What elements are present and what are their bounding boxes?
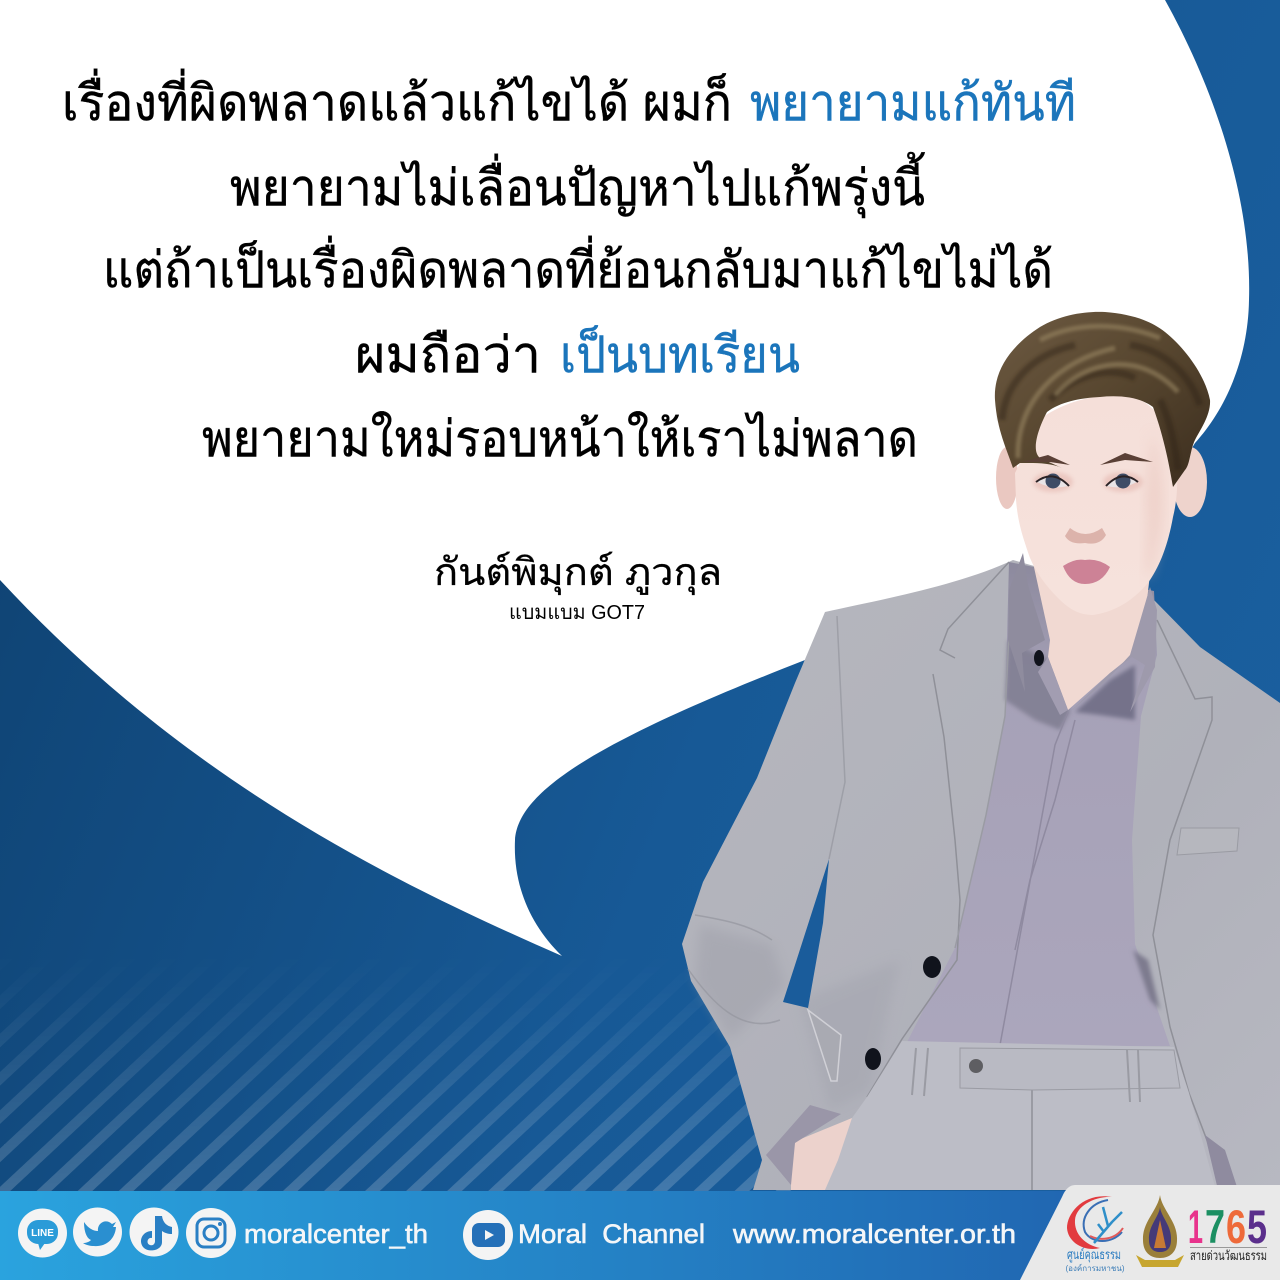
logo: 1765: 6 — [1226, 1200, 1246, 1253]
ear left — [996, 447, 1018, 509]
shirt placket — [1000, 712, 1075, 1045]
eyebrow right — [1100, 453, 1153, 465]
collar left — [1008, 553, 1045, 692]
eye shadow left — [1033, 472, 1073, 492]
waist button — [969, 1059, 983, 1073]
logo: moral center — [1066, 1196, 1125, 1273]
eye shadow right — [1103, 472, 1143, 492]
logo: 1765: 7 — [1205, 1200, 1225, 1253]
shirt — [905, 562, 1170, 1046]
cuff — [766, 1105, 841, 1185]
footer bar — [0, 1191, 1280, 1280]
hair — [995, 312, 1210, 487]
nose shadow — [1065, 528, 1106, 544]
ear right — [1173, 447, 1207, 517]
pocket — [1177, 828, 1239, 855]
person — [682, 312, 1280, 1190]
hair highlights — [1018, 326, 1178, 458]
social handle: moralcenter_th — [244, 1219, 428, 1249]
attribution name: กันต์พิมุกต์ ภูวกุล — [434, 551, 722, 595]
flap pocket — [808, 1010, 841, 1081]
eye right — [1106, 474, 1138, 488]
shirt dark area — [1005, 640, 1070, 730]
waistband — [960, 1048, 1180, 1090]
trousers — [825, 1041, 1216, 1190]
quote line 2: พยายามไม่เลื่อนปัญหาไปแก้พรุ่งนี้ — [230, 152, 925, 218]
quote text — [62, 69, 1076, 467]
belt loops — [912, 1048, 1140, 1190]
icon: Instagram — [186, 1208, 236, 1258]
icon: LINE — [18, 1208, 67, 1258]
jacket shade sleeve — [695, 925, 785, 1040]
eye left — [1036, 474, 1069, 488]
neck — [1028, 540, 1154, 710]
hand — [791, 1118, 852, 1190]
shirt dark area right — [1075, 665, 1135, 720]
logo panel — [1020, 1185, 1280, 1280]
quote line 1: เรื่องที่ผิดพลาดแล้วแก้ไขได้ ผมก็ — [62, 69, 732, 131]
face shading — [1145, 430, 1163, 578]
icon: Twitter — [73, 1208, 122, 1256]
logo: 1765: 1 — [1188, 1200, 1203, 1253]
jacket button lower — [865, 1048, 881, 1070]
arm gap — [783, 859, 829, 1008]
sleeve seam — [688, 616, 845, 1024]
quote line 5: พยายามใหม่รอบหน้าให้เราไม่พลาด — [202, 411, 918, 467]
logo: moral center: (องค์การมหาชน) — [1066, 1263, 1125, 1273]
website: www.moralcenter.or.th — [732, 1219, 1016, 1249]
collar flap — [1038, 657, 1068, 715]
jacket button upper — [923, 956, 941, 978]
right lapel edge — [1153, 620, 1216, 1164]
jacket — [682, 560, 1280, 1190]
right cuff — [1205, 1135, 1238, 1190]
hair dark strands — [1002, 345, 1200, 470]
icon: LINE: LINE — [31, 1228, 54, 1239]
quote line 1 highlight: พยายามแก้ทันที — [750, 75, 1076, 131]
icon: YouTube — [463, 1210, 513, 1260]
logo: crest — [1136, 1195, 1184, 1267]
logo: moral center: ศูนย์คุณธรรม — [1067, 1247, 1121, 1263]
channel name: Moral Channel — [518, 1219, 705, 1249]
collar button — [1034, 650, 1044, 666]
shirt shadow low — [1133, 950, 1160, 1010]
eyebrow left — [1022, 455, 1070, 465]
jacket shade waist — [800, 960, 900, 1110]
quote line 3: แต่ถ้าเป็นเรื่องผิดพลาดที่ย้อนกลับมาแก้ไขไม่ได้ — [103, 236, 1053, 298]
logo: 1765 — [1188, 1200, 1267, 1263]
quote line 4 highlight: เป็นบทเรียน — [560, 325, 800, 383]
quote line 4: ผมถือว่า — [355, 327, 541, 383]
collar right — [1070, 587, 1157, 712]
left lapel right edge — [955, 633, 1009, 948]
left lapel edge — [867, 562, 1009, 1097]
icon: TikTok — [130, 1208, 178, 1256]
lips — [1063, 560, 1110, 584]
background: diagonal stripes — [0, 1008, 792, 1191]
attribution subtitle: แบมแบม GOT7 — [509, 602, 645, 624]
face — [1015, 395, 1177, 615]
logo: 1765: 5 — [1247, 1200, 1267, 1253]
speech bubble — [0, 0, 1249, 956]
